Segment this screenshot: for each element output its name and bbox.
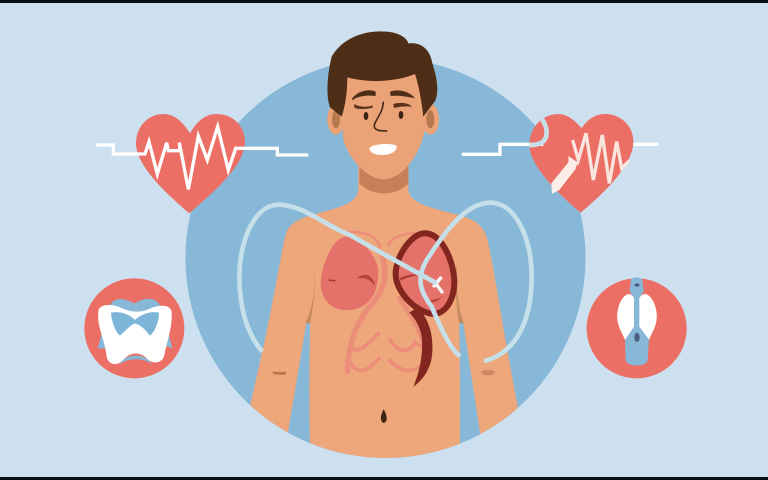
tube ends in chest <box>434 278 442 292</box>
figure: torso and arms <box>239 160 532 460</box>
icon: lungs and trachea <box>587 277 687 378</box>
pen icon <box>551 162 576 194</box>
pink vessels <box>347 232 425 372</box>
neck shadow <box>359 167 408 193</box>
armpit creases <box>305 258 315 323</box>
elbow marks <box>272 372 287 375</box>
figure: head <box>327 31 439 193</box>
ears <box>327 104 344 135</box>
body skin <box>248 160 523 460</box>
right heart with ECG line and pen <box>462 114 658 213</box>
mouth <box>369 144 397 155</box>
right lung with dark outline <box>396 233 454 314</box>
left lung <box>321 237 378 310</box>
icon: tooth <box>84 278 184 378</box>
left heart with ECG line <box>96 114 308 213</box>
eyes <box>364 112 368 120</box>
gaps between arms and torso <box>287 323 310 447</box>
dark vessel tail <box>409 307 432 387</box>
nose <box>374 102 387 131</box>
eyebrows <box>352 90 376 100</box>
tubes <box>239 203 532 361</box>
blue circle backdrop <box>186 58 586 458</box>
tube over heart <box>529 117 547 145</box>
face <box>341 70 425 179</box>
eyelids <box>354 104 373 109</box>
navel <box>381 409 387 423</box>
hair <box>327 31 437 117</box>
